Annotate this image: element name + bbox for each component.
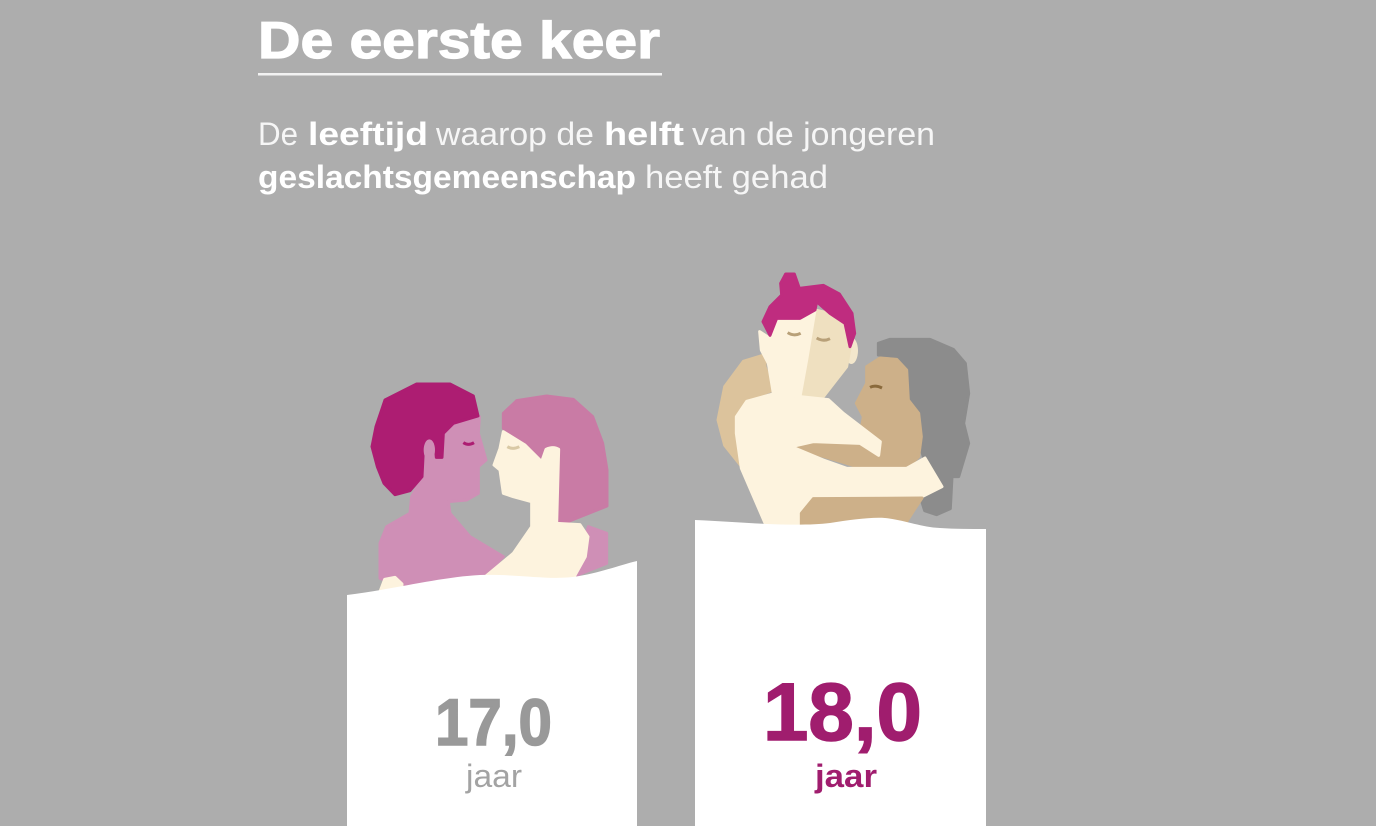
subtitle text: helft (604, 116, 684, 152)
ear right (845, 337, 858, 364)
woman's body (483, 432, 588, 578)
panel: left sheet with 17,0 jaar (347, 561, 637, 826)
value: 18,0: 18,0 (763, 667, 922, 758)
title: De eerste keer (258, 12, 660, 70)
unit: jaar: jaar (814, 758, 877, 794)
subtitle text: De (258, 116, 298, 152)
man's hair (372, 384, 478, 495)
subtitle text: leeftijd (308, 116, 428, 152)
man's body (380, 417, 503, 587)
subtitle text: van de jongeren (692, 116, 935, 152)
subtitle text (258, 116, 935, 195)
tan partner (791, 358, 921, 473)
value: 17,0: 17,0 (435, 685, 552, 759)
panel: right sheet with 18,0 jaar (695, 518, 986, 826)
lower tan body (801, 498, 922, 527)
subtitle text: geslachtsgemeenschap (258, 159, 636, 195)
back face (800, 310, 850, 402)
hand (380, 577, 402, 592)
man's ear (424, 439, 435, 461)
illustration: couple left (372, 384, 607, 592)
subtitle text: heeft gehad (645, 159, 828, 195)
tan arm (718, 355, 773, 469)
cream body (736, 393, 942, 530)
unit: jaar: jaar (465, 758, 522, 794)
front face (760, 310, 815, 397)
woman's far shoulder (573, 527, 607, 577)
hair with bun (763, 274, 855, 347)
woman's hair (503, 396, 607, 525)
eyes (788, 333, 801, 335)
subtitle text: waarop de (435, 116, 594, 152)
dark hair (878, 339, 969, 515)
illustration: couple right (718, 274, 969, 530)
eyes (463, 443, 474, 444)
